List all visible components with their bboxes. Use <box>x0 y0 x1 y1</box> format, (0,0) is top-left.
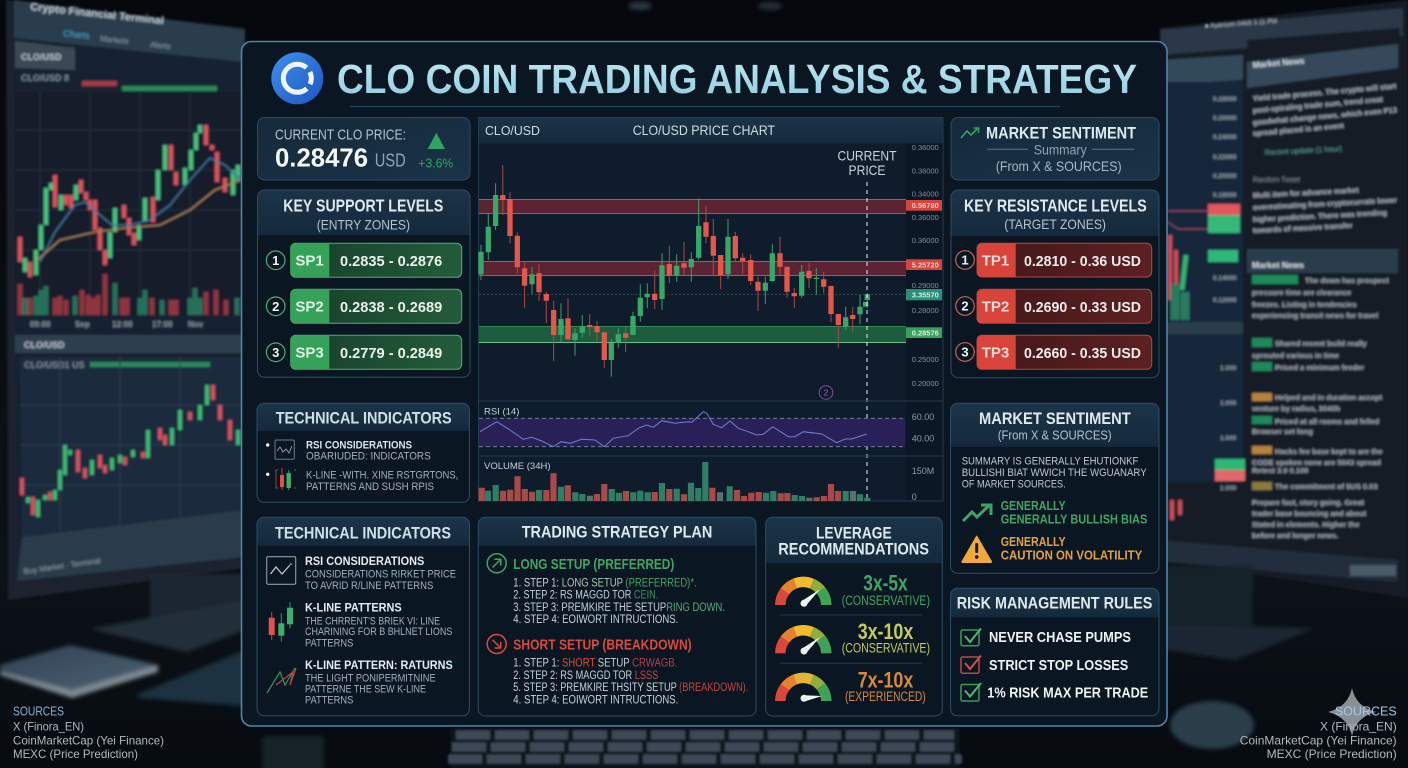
icon: bullish arrow <box>963 505 991 521</box>
icon: candlesticks <box>269 602 293 642</box>
background: right monitor with market news: 1.000 <box>1220 435 1237 442</box>
panel: technical indicators detail: RSI CONSIDERATIONS <box>305 554 424 568</box>
background: right monitor with market news: pressure time are clearance <box>1252 288 1351 297</box>
background: right monitor with market news: Random Tweet <box>1253 177 1300 184</box>
background: right monitor with market news: 0.22000 <box>1213 154 1237 161</box>
resistance level 2: 2 <box>961 299 969 314</box>
panel: CLO/USD price chart: CLO/USD PRICE CHART <box>633 123 775 138</box>
icon: candlesticks small <box>276 468 296 490</box>
price axis labels: 0.36000 <box>912 143 939 152</box>
background: right monitor with market news: Market News <box>1252 55 1305 70</box>
background: left monitor with charts: 12:00 <box>112 320 133 329</box>
panel: current price: CURRENT CLO PRICE: <box>275 126 406 144</box>
price axis labels: 0.36000 <box>912 166 939 176</box>
rule: strict stop losses <box>961 656 1129 674</box>
background: right monitor with market news: Helped and in duration accept <box>1275 393 1383 402</box>
icon: crossing trend lines <box>267 668 296 693</box>
panel: current price: 0.28476 <box>275 143 368 173</box>
gauge: 3x-10x: 3x-10x <box>858 619 914 644</box>
panel: technical indicators detail: CONSIDERATIONS RIRKET PRICE <box>305 569 456 581</box>
RSI sub-chart: RSI (14) <box>484 406 519 418</box>
price axis labels: 0.36000 <box>912 213 939 222</box>
long setup: 1. STEP 1: LONG SETUP (PREFERRED)*. <box>513 578 697 590</box>
icon: long arrow <box>487 554 506 573</box>
support level 2: SP2 <box>295 299 324 316</box>
resistance level 1: 1 <box>961 253 969 268</box>
gauge: 3x-5x: (CONSERVATIVE) <box>842 593 930 608</box>
support level 2: 0.2838 - 0.2689 <box>340 300 442 316</box>
long setup <box>487 554 725 626</box>
background: right monitor with market news: The down has prospect <box>1305 276 1389 285</box>
background: right monitor with market news: 0.26000 <box>1213 115 1237 122</box>
panel: key resistance levels: (TARGET ZONES) <box>1004 216 1106 232</box>
background: left monitor with charts: Crypto Financial Terminal <box>30 1 164 27</box>
panel: leverage recommendations: LEVERAGE <box>816 523 892 542</box>
background: right monitor with market news: before and longer news. <box>1252 531 1338 540</box>
support level 1: 1 <box>272 253 279 268</box>
panel: market sentiment summary <box>951 118 1159 180</box>
panel: technical indicators summary: PATTERNS AND SUSH RPIS <box>306 481 434 493</box>
price tags: 3.35570 <box>912 290 939 299</box>
background: right monitor with market news: Yield trade process. The crypto will start <box>1252 81 1397 103</box>
gauge: 3x-10x <box>780 619 930 656</box>
background: left monitor with charts: Buy Market · Terminal <box>23 556 101 576</box>
background: right monitor with market news: spread placed is an event <box>1252 121 1345 138</box>
panel: technical indicators summary <box>257 403 470 502</box>
panel: current price: +3.6% <box>418 156 454 170</box>
long setup: 2. STEP 2: RS MAGGD TOR CEIN. <box>513 590 658 602</box>
background: right monitor with market news: Multi item for advance market <box>1253 185 1359 200</box>
background: right monitor with market news: Priced at all rooms and felled <box>1275 417 1380 426</box>
support level 1 <box>266 243 462 277</box>
short setup: 5. STEP 3: PREMKIRE THSITY SETUP (BREAKDOWN). <box>513 682 748 694</box>
gauge: 7x-10x <box>780 667 926 704</box>
panel: market sentiment detail: GENERALLY <box>1001 499 1066 513</box>
panel: technical indicators detail: K-LINE PATTERN: RATURNS <box>305 658 453 672</box>
support level 3 <box>266 335 462 369</box>
background: left monitor with charts: Sep <box>75 320 90 329</box>
background: right monitor with market news: 0.18000 <box>1213 192 1237 199</box>
sources: left: X (Finora_EN) <box>13 720 84 734</box>
price tags: 5.25720 <box>912 260 939 269</box>
background: right monitor with market news: sprouted various in time <box>1252 351 1339 360</box>
panel: technical indicators summary: TECHNICAL INDICATORS <box>276 408 452 427</box>
RSI sub-chart: 60.00 <box>912 412 934 422</box>
background: left monitor with charts: Charts <box>63 28 91 41</box>
icon: purple marker <box>819 386 833 399</box>
price axis labels: 0.36000 <box>912 236 939 245</box>
background: left monitor with charts: Alerts <box>150 40 171 51</box>
background: right monitor with market news: 0.14000 <box>1213 275 1237 282</box>
panel: market sentiment detail: (From X & SOURCES) <box>998 427 1112 442</box>
panel: market sentiment summary: Summary <box>1034 142 1087 157</box>
panel: technical indicators summary: RSI CONSIDERATIONS <box>306 439 412 451</box>
background: right monitor with market news: Prepare fast, story going. Great <box>1252 498 1365 507</box>
background: right monitor with market news: ● Ayanium 0469 3.11 PM <box>1205 18 1277 30</box>
background: right monitor with market news: goodwhat change news, which even P13 <box>1252 105 1397 127</box>
resistance level 1 <box>956 243 1152 277</box>
background: right monitor with market news: Market News <box>1252 260 1304 270</box>
rule: never chase pumps <box>961 628 1131 646</box>
sources: left: CoinMarketCap (Yei Finance) <box>13 734 164 748</box>
panel: technical indicators detail: THE CHRRENT'S BRIEK VI: LINE <box>305 615 440 627</box>
price axis labels: 0.28000 <box>912 306 939 315</box>
candlesticks <box>481 165 867 377</box>
panel: market sentiment detail: OF MARKET SOURCES. <box>962 479 1066 491</box>
sources: right: MEXC (Price Prediction) <box>1267 747 1397 761</box>
short setup: 2. STEP 2: RS MAGGD TOR LSSS <box>513 670 659 682</box>
panel: market sentiment detail <box>950 403 1159 573</box>
panel: trading strategy plan: TRADING STRATEGY PLAN <box>522 522 712 541</box>
panel: leverage recommendations: RECOMMENDATIONS <box>778 539 929 558</box>
resistance level 3 <box>956 335 1152 369</box>
panel: key support levels: (ENTRY ZONES) <box>317 216 410 232</box>
background: right monitor with market news: freezes. Listing in tendencies <box>1252 300 1357 309</box>
price axis labels: 0.20000 <box>912 379 939 388</box>
panel: market sentiment detail: SUMMARY IS GENERALLY EHUTIONKF <box>962 455 1139 467</box>
panel: technical indicators detail: PATTERNE THE SEW K-LINE <box>305 684 426 696</box>
gauge: 3x-5x <box>780 571 930 608</box>
support level 2: 2 <box>272 299 279 314</box>
panel: market sentiment detail: GENERALLY BULLISH BIAS <box>1001 512 1147 526</box>
sources: left: MEXC (Price Prediction) <box>13 747 138 761</box>
background: right monitor with market news: 1.000 <box>1220 400 1237 407</box>
short setup: SHORT SETUP (BREAKDOWN) <box>513 636 692 653</box>
resistance level 3: 3 <box>961 345 969 360</box>
panel: CLO/USD price chart <box>478 118 943 502</box>
background: right monitor with market news: CODE spoken none are 5043 spread <box>1252 458 1381 467</box>
current price marker <box>838 148 897 500</box>
volume sub-chart: 150M <box>912 466 934 476</box>
resistance level 1: 0.2810 - 0.36 USD <box>1024 254 1141 270</box>
icon: warning triangle <box>962 536 992 562</box>
panel: technical indicators detail: TO AVRID R/LINE PATTERNS <box>305 580 433 592</box>
support level 3: 3 <box>272 345 279 360</box>
resistance and support zones <box>479 199 906 343</box>
background: left monitor with charts: Markets <box>100 34 129 46</box>
background: left monitor with charts: 09:00 <box>30 320 51 329</box>
rule: strict stop losses: STRICT STOP LOSSES <box>989 658 1129 674</box>
resistance level 3: 0.2660 - 0.35 USD <box>1024 346 1141 362</box>
support level 3: SP3 <box>295 345 324 362</box>
panel: key support levels: KEY SUPPORT LEVELS <box>283 196 443 216</box>
background: left monitor with charts <box>6 0 245 600</box>
volume sub-chart <box>482 461 934 502</box>
resistance level 3: TP3 <box>982 344 1009 362</box>
resistance level 2: TP2 <box>982 298 1009 316</box>
icon: CLO coin logo <box>271 52 323 104</box>
sources: right: SOURCES <box>1335 705 1397 719</box>
sources: right: CoinMarketCap (Yei Finance) <box>1240 734 1397 748</box>
support level 3: 0.2779 - 0.2849 <box>340 346 442 362</box>
sources: left: SOURCES <box>13 705 64 719</box>
panel: technical indicators detail: PATTERNS <box>305 637 353 649</box>
background: right monitor with market news: higher prediction. There was trending <box>1253 208 1388 224</box>
gauge: 3x-10x: (CONSERVATIVE) <box>842 641 930 656</box>
background: right monitor with market news: Recent update (1 hour) <box>1265 144 1343 157</box>
background: left monitor with charts: CLO/USD <box>24 340 65 350</box>
panel: key resistance levels: KEY RESISTANCE LEVELS <box>964 196 1147 216</box>
panel: market sentiment detail: CAUTION ON VOLATILITY <box>1001 548 1143 562</box>
rule: one percent risk <box>961 683 1149 702</box>
panel: current price: USD <box>375 150 406 170</box>
background: right monitor with market news: overestimating from cryptocurrate lower <box>1253 195 1397 212</box>
RSI sub-chart: 40.00 <box>912 434 934 444</box>
background: right monitor with market news: 0.24000 <box>1213 134 1237 141</box>
panel: technical indicators summary: K-LINE -WITH. XINE RSTGRTONS, <box>306 469 458 481</box>
support level 1: 0.2835 - 0.2876 <box>340 254 442 270</box>
background: right monitor with market news: 0.28000 <box>1213 96 1237 103</box>
panel: market sentiment detail: MARKET SENTIMENT <box>979 409 1131 428</box>
panel: risk management rules <box>950 588 1159 716</box>
sources: right <box>1240 705 1397 761</box>
panel: market sentiment summary: MARKET SENTIMENT <box>986 124 1136 142</box>
price axis labels: 0.34000 <box>912 190 939 198</box>
gauge: 3x-5x: 3x-5x <box>863 571 908 596</box>
price axis labels: 0.25000 <box>912 355 939 364</box>
panel: CLO/USD price chart: CLO/USD <box>485 123 540 138</box>
current price marker: PRICE <box>848 162 886 178</box>
gauge: 7x-10x: (EXPERIENCED) <box>845 689 926 704</box>
volume sub-chart: VOLUME (34H) <box>484 461 551 472</box>
sources: right: X (Finora_EN) <box>1320 720 1397 734</box>
price axis labels: 0.29000 <box>912 281 939 290</box>
background: right monitor with market news: Stated in elements. Higher the <box>1252 520 1360 529</box>
icon: RSI chart <box>267 557 296 584</box>
rule: one percent risk: 1% RISK MAX PER TRADE <box>987 686 1149 702</box>
long setup: 3. STEP 3: PREMKIRE THE SETUPRING DOWN. <box>513 602 725 614</box>
price axis labels <box>912 143 939 388</box>
panel: technical indicators detail <box>257 517 470 716</box>
short setup: 1. STEP 1: SHORT SETUP CRWAGB. <box>513 658 677 670</box>
panel: market sentiment summary: (From X & SOURCES) <box>996 158 1122 174</box>
background: right monitor with market news: experiencing transit news for travel <box>1252 311 1378 320</box>
panel: trading strategy plan <box>478 517 756 716</box>
gauge: 7x-10x: 7x-10x <box>858 667 914 692</box>
background: left monitor with charts: 17:00 <box>152 320 173 329</box>
background: keyboard <box>448 728 962 768</box>
long setup: 4. STEP 4: EOIWORT INTRUCTIONS. <box>513 614 678 626</box>
background: right monitor with market news: trader base bouncing and about <box>1252 509 1367 518</box>
title: CLO COIN TRADING ANALYSIS & STRATEGY <box>337 56 1137 102</box>
background: right monitor with market news: Shared recent build really <box>1275 339 1368 348</box>
background: left monitor with charts: CLO/USD <box>21 52 62 62</box>
background: left monitor with charts: CLO/USD 8 <box>21 73 69 83</box>
background: right monitor with market news: venture by radius, 3040h <box>1252 404 1340 413</box>
short setup <box>487 634 748 706</box>
background: right monitor with market news: 1.000 <box>1220 365 1237 372</box>
icon: short arrow <box>487 634 506 654</box>
background: right monitor with market news: The commitment of $US 0.03 <box>1275 482 1378 491</box>
background: right monitor with market news: towards of massive transfer <box>1253 221 1353 235</box>
resistance level 1: TP1 <box>982 252 1009 270</box>
price tags: 0.56780 <box>912 201 939 210</box>
background: right monitor with market news: 0.12000 <box>1213 297 1237 304</box>
resistance level 2: 0.2690 - 0.33 USD <box>1024 300 1141 316</box>
panel: current price <box>258 118 470 180</box>
icon: RSI chart small <box>275 440 294 459</box>
panel: market sentiment detail: GENERALLY <box>1001 535 1066 549</box>
main infographic panel <box>242 42 1167 726</box>
resistance level 2 <box>956 289 1152 323</box>
price tags <box>906 200 942 338</box>
panel: risk management rules: RISK MANAGEMENT RULES <box>957 593 1152 612</box>
short setup: 4. STEP 4: EOIWORT INTRUCTIONS. <box>513 694 678 706</box>
panel: technical indicators detail: PATTERNS <box>305 694 353 706</box>
rule: never chase pumps: NEVER CHASE PUMPS <box>989 630 1131 646</box>
long setup: LONG SETUP (PREFERRED) <box>513 556 674 573</box>
background: right monitor with market news: Priced a minimum feeder <box>1275 363 1364 372</box>
panel: technical indicators detail: K-LINE PATTERNS <box>305 601 402 615</box>
panel: leverage recommendations <box>766 517 942 716</box>
icon: purple marker: 2 <box>824 388 829 398</box>
icon: sparkle star <box>1328 688 1376 736</box>
panel: technical indicators detail: THE LIGHT PONIPERMITNINE <box>305 673 436 685</box>
volume sub-chart: 0 <box>912 492 917 502</box>
background: right monitor with market news <box>1160 0 1408 598</box>
panel: key support levels <box>258 190 470 377</box>
current price marker: CURRENT <box>838 148 897 164</box>
panel: technical indicators detail: CHARINING FOR B BHLNET LIONS <box>305 626 452 638</box>
sources: left <box>13 705 164 761</box>
panel: market sentiment detail: BULLISHI BIAT WWICH THE WGUANARY <box>962 467 1147 479</box>
panel: technical indicators detail: TECHNICAL INDICATORS <box>275 523 451 542</box>
background: right monitor with market news: post-spiraling trade sum, trend creat <box>1252 95 1384 115</box>
RSI sub-chart <box>479 401 943 456</box>
background: left monitor with charts: Nov <box>188 320 204 329</box>
background: left monitor with charts: CLO/USD1 US <box>24 360 85 370</box>
background: right monitor with market news: Retest 3.0 0.100 <box>1252 466 1308 475</box>
background: right monitor with market news: Browser set long <box>1252 427 1313 436</box>
background: right monitor with market news: 1.000 <box>1220 485 1237 492</box>
price tags: 0.28576 <box>912 328 939 337</box>
panel: key resistance levels <box>951 190 1159 378</box>
icon: trend arrow <box>961 128 978 138</box>
background: right monitor with market news: 0.20000 <box>1213 173 1237 180</box>
support level 1: SP1 <box>295 253 324 270</box>
background: right monitor with market news: Hacks fee base kept to are the <box>1275 447 1383 456</box>
support level 2 <box>266 289 462 323</box>
panel: technical indicators summary: OBARIUDED: INDICATORS <box>306 451 431 463</box>
